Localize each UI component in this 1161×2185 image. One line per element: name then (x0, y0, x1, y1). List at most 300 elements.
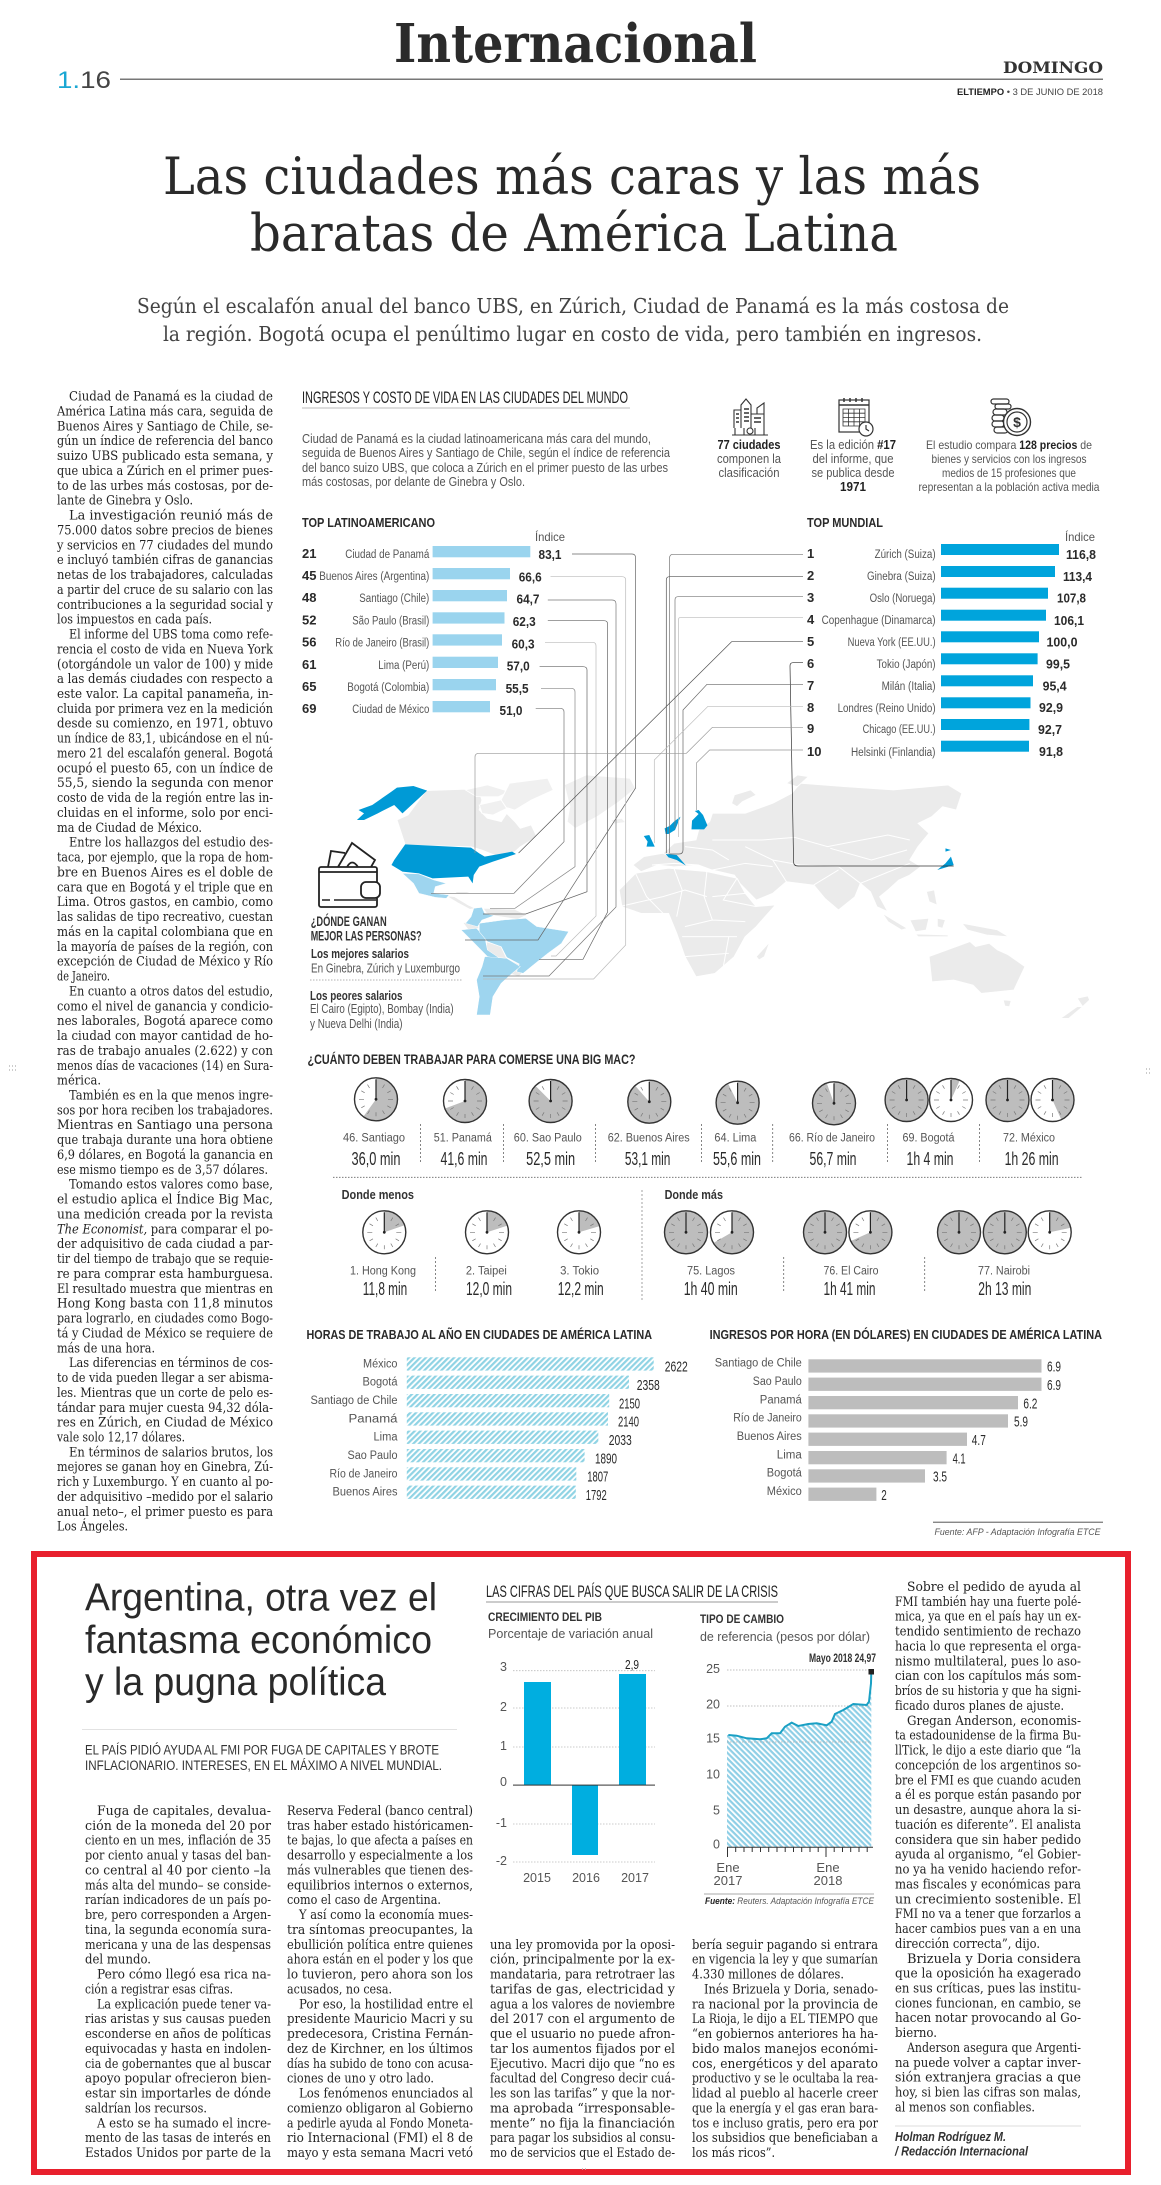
x labels: Ene (816, 1860, 840, 1875)
article text: left column: tá y Ciudad de México se requiere de (57, 1326, 273, 1341)
article text: argentina column 5: llTick, le dijo a este diario que “la (895, 1744, 1081, 1759)
article text: argentina column 5: FMI también hay una fuerte polé- (895, 1595, 1081, 1610)
article text: left column: la ciudad con mayor cantidad de ho- (57, 1029, 273, 1044)
article text: argentina column 5: tendido sentimiento de rechazo (895, 1625, 1081, 1640)
article text: argentina column 3: les son las tarifas” y que la nor- (490, 2086, 675, 2102)
city labels: México (363, 1358, 398, 1370)
ranks: 7 (807, 678, 814, 693)
article text: argentina column 5: ciones funcionan, en cambio, se (895, 1996, 1081, 2011)
chart subtitle: Porcentaje de variación anual (488, 1626, 653, 1641)
article text: left column: res en Zúrich, en Ciudad de México (57, 1416, 273, 1431)
peak label: Mayo 2018 24,97 (809, 1653, 876, 1665)
article text: argentina column 1: del mundo. (85, 1953, 151, 1968)
article text: argentina column 4: ra nacional por la provincia de (692, 1997, 878, 2012)
headline: argentina: fantasma económico (85, 1619, 432, 1662)
stat: 77 cities: 77 ciudades (718, 438, 781, 452)
city labels: top row: 69. Bogotá (902, 1133, 955, 1145)
ranks: 8 (807, 700, 814, 715)
infographic intro text: seguida de Buenos Aires y Santiago de Chile, según el índice de referencia (302, 446, 670, 460)
values: 2622 (665, 1359, 688, 1376)
chart subtitle: de referencia (pesos por dólar) (700, 1629, 870, 1644)
article text: argentina column 2 (287, 1804, 474, 2161)
bars (941, 544, 1059, 752)
article text: left column: Entre los hallazgos del estudio des- (69, 836, 273, 851)
article text: left column: cluidas en el informe, solo por enci- (57, 806, 273, 821)
article text: argentina column 1: saldrían los recursos. (85, 2101, 207, 2116)
article text: argentina column 2: rio Internacional (FMI) el 8 de (287, 2131, 473, 2146)
stat: edition 17: 1971 (840, 480, 866, 494)
panel: big mac working time (308, 1052, 1083, 1302)
article text: left column: tándar para mujer cuesta 94,32 dóla- (57, 1401, 273, 1416)
article text: argentina column 3: ma aprobada “irresponsable- (490, 2101, 675, 2116)
cities: Lima (Perú) (378, 660, 429, 672)
y labels: 25 (706, 1662, 720, 1676)
article text: argentina column 5: mas fiscales y económicas para (895, 1877, 1081, 1892)
ranks: 6 (807, 656, 814, 671)
values: 3.5 (933, 1469, 947, 1486)
city labels: Santiago de Chile (715, 1358, 802, 1370)
city labels: top row: 64. Lima (714, 1133, 757, 1145)
article text: argentina column 2: días ha subido de tono con acusa- (287, 2057, 473, 2072)
index values (500, 547, 562, 718)
article text: left column: 55,5, siendo la segunda con menor (57, 776, 274, 791)
ranks: 61 (302, 657, 316, 672)
article text: left column: El resultado muestra que mientras en (57, 1282, 274, 1297)
cities: Río de Janeiro (Brasil) (335, 638, 429, 650)
stat: 77 cities (717, 438, 781, 480)
times: top row: 55,6 min (713, 1149, 761, 1169)
index values: 92,9 (1039, 700, 1063, 715)
cities: Chicago (EE.UU.) (863, 724, 936, 736)
section name: Internacional (394, 13, 757, 75)
article text: left column: der adquisitivo –medido por el salario (57, 1490, 273, 1505)
article text: left column: que ubica a Zúrich en el primer pues- (57, 464, 273, 479)
cities: Copenhague (Dinamarca) (822, 615, 936, 627)
ranks: 1 (807, 546, 814, 561)
y axis: 2 (500, 1700, 507, 1714)
article text: left column: nes laborales, Bogotá aparece como (57, 1014, 273, 1029)
article text: argentina column 5: Sobre el pedido de ayuda al (907, 1580, 1081, 1595)
callout: where people earn better: En Ginebra, Zúrich y Luxemburgo (311, 962, 460, 976)
article text: left column: más en la capital colombiana que en (57, 925, 274, 940)
subhead: argentina: EL PAÍS PIDIÓ AYUDA AL FMI POR FUGA DE CAPITALES Y BROTE (85, 1742, 439, 1758)
times: bottom row: 11,8 min (363, 1279, 407, 1299)
article text: argentina column 3: mente” no fija la financiación (490, 2116, 676, 2131)
article text: argentina column 5: Brizuela y Doria considera (907, 1952, 1081, 1967)
article text: argentina column 5: hoy, si bien las cifras son malas, (895, 2086, 1081, 2101)
article text: argentina column 1: cia de gobernantes que al buscar (85, 2057, 272, 2072)
times: bottom row: 1h 41 min (824, 1279, 876, 1299)
icon: coins (991, 399, 1030, 436)
article text: left column: menos días de vacaciones (14) en Sura- (57, 1059, 273, 1074)
stat: 128 prices: medios de 15 profesiones que (942, 466, 1076, 480)
index values: 60,3 (512, 636, 535, 651)
cities: Buenos Aires (Argentina) (319, 571, 429, 583)
y labels: 20 (706, 1698, 720, 1712)
city labels: top row (343, 1133, 1055, 1145)
article text: left column: ese mismo tiempo es de 3,57 dólares. (57, 1163, 268, 1178)
times: top row: 36,0 min (352, 1149, 400, 1169)
city labels: bottom row: 76. El Cairo (824, 1265, 878, 1277)
article text: argentina column 1: rias aristas y sus causas pueden (85, 2012, 272, 2027)
article text: argentina column 5: en sus críticas, pues las institu- (895, 1982, 1081, 1996)
article text: argentina column 4: 4.330 millones de dólares. (692, 1968, 844, 1983)
article text: argentina column 4 (692, 1938, 879, 2161)
y axis (496, 1660, 507, 1868)
article text: argentina column 5: mica, ya que en el país hay un ex- (895, 1610, 1081, 1625)
stat: 128 prices: bienes y servicios con los ingresos (932, 452, 1086, 466)
article text: argentina column 2: predecesora, Cristina Fernán- (287, 2027, 473, 2042)
callout: where people earn better (310, 912, 462, 1031)
article text: left column: Tomando estos valores como base, (69, 1178, 273, 1193)
article text: argentina column 4: lidad al pueblo al hacerle creer (692, 2086, 879, 2102)
article text: left column: les. Mientras que un corte de pelo es- (57, 1386, 273, 1401)
article text: argentina column 4: “en gobiernos anteriores ha ha- (692, 2027, 878, 2042)
x axis: 2015 (523, 1871, 551, 1885)
article text: left column: netas de los trabajadores, calculadas (57, 568, 273, 583)
callout: where people earn better: ¿DÓNDE GANAN (311, 912, 387, 929)
stat: 77 cities: componen la (717, 452, 781, 466)
subhead: argentina (85, 1742, 442, 1773)
article text: left column: 75.000 datos sobre precios de bienes (57, 523, 273, 538)
highlighted Latin American countries (402, 873, 569, 1015)
article text: argentina column 1: apoyo popular ofrecieron bien- (85, 2072, 271, 2087)
article text: argentina column 1: ciento en un mes, inflación de 35 (85, 1834, 271, 1849)
ranks: 56 (302, 634, 316, 650)
values: 6.2 (1023, 1395, 1037, 1412)
city labels: top row: 46. Santiago (343, 1133, 405, 1145)
article text: argentina column 5: un crecimiento sostenible. El (895, 1892, 1081, 1907)
article text: left column: un índice de 83,1, ubicándose en el nú- (57, 732, 273, 747)
article text: argentina column 2: lo tuvieron, pero ahora son los (287, 1968, 473, 1983)
byline: / Redacción Internacional (894, 2144, 1028, 2159)
article text: argentina column 5: hacen notar provocando al Go- (895, 2011, 1081, 2026)
article text: argentina column 5: bríos de su historia y que ha signi- (895, 1684, 1081, 1699)
city labels: top row: 66. Río de Janeiro (789, 1133, 875, 1145)
cities: Milán (Italia) (882, 681, 936, 693)
article text: argentina column 3: una ley promovida por la oposi- (490, 1938, 675, 1953)
values (881, 1359, 1061, 1504)
ranks: 65 (302, 679, 316, 694)
callout: where people earn better: MEJOR LAS PERSONAS? (311, 928, 422, 944)
line chart: exchange rate (700, 1614, 876, 1907)
index values: 99,5 (1046, 656, 1070, 671)
article text: left column: ras de trabajo anuales (2.622) y con (57, 1044, 274, 1059)
article text: argentina column 4: tos e incluso gratis, pero era por (692, 2116, 879, 2131)
times: bottom row: 1h 40 min (684, 1279, 738, 1299)
article text: argentina column 4: productivo y se le ocultaba la rea- (692, 2072, 878, 2087)
times: bottom row: 12,2 min (558, 1279, 604, 1299)
article text: argentina column 2: ebullición política entre quienes (287, 1938, 473, 1953)
article text: left column: tir del tiempo de trabajo que se requie- (57, 1252, 273, 1267)
article text: argentina column 3: mo de servicios que el Estado de- (490, 2146, 675, 2161)
ranks: 21 (302, 546, 316, 561)
article text: argentina column 5: Gregan Anderson, economis- (907, 1714, 1081, 1729)
city labels: top row: 62. Buenos Aires (608, 1133, 690, 1145)
article text: argentina column 5: a él es porque están pasando por (895, 1788, 1082, 1803)
stat: 128 prices: El estudio compara 128 precios de (926, 438, 1092, 452)
values: 2150 (619, 1395, 640, 1412)
cities: São Paulo (Brasil) (352, 616, 429, 628)
times: top row: 1h 26 min (1005, 1149, 1059, 1169)
values: 2140 (618, 1414, 639, 1431)
article text: left column: vale solo 12,17 dólares. (56, 1430, 185, 1446)
article text: argentina column 4: que la energía y el gas eran bara- (692, 2101, 878, 2116)
article text: argentina column 5 (895, 1580, 1082, 2116)
article text: left column: Buenos Aires y Santiago de Chile, se- (57, 419, 273, 434)
article text: left column: Hong Kong basta con 11,8 minutos (57, 1297, 273, 1312)
article text: left column: las salidas de tipo recreativo, cuestan (57, 910, 274, 925)
article text: left column: 6,9 dólares, en Bogotá la ganancia en (57, 1148, 274, 1163)
article text: argentina column 3: del 2017 con el argumento de (490, 2012, 675, 2027)
article text: left column: costo de vida de la región entre las in- (57, 791, 273, 806)
article text: argentina column 5: hacia lo que representa el orga- (895, 1640, 1081, 1654)
article text: argentina column 2: equilibrios internos o externos, (287, 1878, 473, 1893)
connector lines from ranking to map (431, 554, 954, 979)
city labels: Lima (374, 1432, 398, 1444)
subtitle: Según el escalafón anual del banco UBS, en Zúrich, Ciudad de Panamá es la más costosa de (137, 294, 1009, 318)
article text: argentina column 2: más vulnerables que tienen des- (287, 1864, 473, 1878)
index values: 62,3 (513, 614, 536, 629)
article text: left column: sos por hora reciben los trabajadores. (57, 1103, 273, 1118)
article text: argentina column 2: como el caso de Argentina. (287, 1893, 441, 1908)
article text: argentina column 5: tuación es diferente”. El analista (895, 1818, 1081, 1833)
article text: left column: mejores se ganan hoy en Ginebra, Zú- (57, 1460, 273, 1475)
article text: argentina column 5: na puede volver a captar inver- (895, 2056, 1081, 2071)
heading: TOP LATINOAMERICANO (302, 515, 435, 530)
cities: Ciudad de México (352, 704, 429, 716)
clocks: bottom row (363, 1211, 1071, 1254)
x axis: 2016 (572, 1871, 600, 1885)
article text: left column: to de vida pueden llegar a ser abisma- (57, 1371, 273, 1386)
y axis: -2 (496, 1854, 507, 1868)
article text: argentina column 2: tras haber estado históricamen- (287, 1819, 473, 1834)
article text: argentina column 1: ción a registrar esas cifras. (85, 1982, 233, 1997)
heading: HORAS DE TRABAJO AL AÑO EN CIUDADES DE AMÉRICA LATINA (306, 1327, 653, 1342)
city labels (715, 1358, 802, 1498)
values (586, 1359, 688, 1504)
bars (433, 546, 530, 712)
article text: left column: Los Ángeles. (57, 1519, 128, 1535)
article text: left column: América Latina más cara, seguida de (56, 404, 273, 420)
ranks: 2 (807, 568, 814, 583)
city labels: Buenos Aires (332, 1487, 398, 1499)
main title: Las ciudades más caras y las más (163, 148, 981, 207)
article text: argentina column 5: que la oposición ha exagerado (895, 1967, 1081, 1982)
chart title: TIPO DE CAMBIO (700, 1614, 784, 1626)
article text: left column: En cuanto a otros datos del estudio, (69, 984, 273, 999)
heading: TOP MUNDIAL (807, 515, 883, 530)
y labels: 5 (713, 1804, 720, 1818)
y axis: 3 (500, 1660, 507, 1674)
city labels: bottom row: 1. Hong Kong (350, 1265, 416, 1277)
article text: argentina column 1: tina, la segunda economía sura- (85, 1923, 271, 1938)
city labels: bottom row: 77. Nairobi (978, 1265, 1030, 1277)
x labels: 2017 (714, 1873, 742, 1888)
article text: left column: la mayoría de países de la región, con (57, 940, 274, 955)
source note: Fuente: AFP - Adaptación Infografía ETCE (934, 1527, 1101, 1538)
article text: argentina column 5: concepción de los argentinos so- (895, 1758, 1081, 1773)
article text: argentina column 4: en vigencia la ley y que sumarían (692, 1953, 879, 1968)
article text: argentina column 2: ciones de uno y otro lado. (287, 2072, 434, 2087)
article text: argentina column 1: La explicación puede tener va- (97, 1997, 271, 2012)
ranks: 4 (807, 612, 815, 627)
peak marker (868, 1669, 874, 1674)
city labels: Río de Janeiro (733, 1413, 802, 1425)
city labels: Santiago de Chile (310, 1395, 398, 1407)
article text: left column: El informe del UBS toma como refe- (69, 628, 273, 642)
times: bottom row: 12,0 min (466, 1279, 512, 1299)
ranks: 48 (302, 590, 316, 605)
article text: argentina column 2: desarrollo y especialmente a los (287, 1849, 473, 1864)
article text: left column: desde su comienzo, en 1971, obtuvo (57, 717, 273, 732)
article text: argentina column 1: Fuga de capitales, devalua- (97, 1804, 271, 1819)
article text: left column: lante de Ginebra y Oslo. (57, 494, 193, 509)
values: 2033 (609, 1432, 632, 1449)
times: top row: 56,7 min (810, 1149, 856, 1169)
heading: ¿CUÁNTO DEBEN TRABAJAR PARA COMERSE UNA BIG MAC? (308, 1052, 636, 1067)
article text: argentina column 4: bido malos manejos económi- (692, 2042, 878, 2057)
article text: left column: Lima. Otros gastos, en cambio, como (57, 895, 273, 910)
clocks: top row (354, 1078, 1074, 1125)
bar chart: annual working hours (306, 1327, 688, 1504)
article text: argentina column 3: que el usuario no puede afron- (490, 2027, 675, 2042)
article text: argentina column 1: estar sin importarles de dónde (85, 2086, 271, 2102)
article text: argentina column 2: presidente Mauricio Macri y su (287, 2012, 473, 2027)
article text: argentina column 5: considera que sin haber pedido (895, 1833, 1081, 1848)
article text: argentina column 1: Pero cómo llegó esa rica na- (97, 1968, 271, 1983)
article text: argentina column 5: un desastre, aunque ahora la si- (895, 1803, 1081, 1818)
article text: left column: de Janeiro. (57, 970, 110, 984)
times: bottom row (363, 1279, 1031, 1299)
cities: Nueva York (EE.UU.) (848, 637, 936, 649)
article text: argentina column 5: bierno. (895, 2026, 937, 2041)
cities: Helsinki (Finlandia) (851, 747, 936, 759)
index label: Índice (535, 529, 565, 544)
values: 4.1 (953, 1450, 966, 1467)
article text: argentina column 5: sión extranjera gracias a que (895, 2071, 1081, 2086)
article text: argentina column 4: Inés Brizuela y Doria, senado- (704, 1982, 878, 1997)
stat: edition 17: se publica desde (812, 466, 895, 480)
index values: 113,4 (1063, 569, 1093, 584)
article text: argentina column 4: los más ricos”. (692, 2146, 775, 2161)
x axis (727, 1847, 873, 1857)
article text: argentina column 1: Estados Unidos por parte de la (85, 2146, 271, 2161)
values: 1890 (595, 1450, 617, 1467)
index values: 106,1 (1054, 613, 1084, 628)
ranks: 45 (302, 568, 316, 583)
index values: 100,0 (1046, 635, 1078, 650)
article text: left column: cluida por primera vez en la medición (57, 702, 274, 717)
infographic intro text (302, 432, 670, 489)
article text: argentina column 1: más alta del mundo– se conside- (85, 1878, 271, 1893)
headline: argentina: Argentina, otra vez el (85, 1577, 437, 1620)
article text: argentina column 5: al menos son confiables. (895, 2100, 1035, 2116)
article text: argentina column 3: mandataria, para retrotraer las (490, 1968, 675, 1983)
article text: left column: e incluyó también cifras de ganancias (57, 553, 273, 568)
index values: 116,8 (1066, 547, 1096, 562)
article text: left column: der adquisitivo de cada ciudad a par- (57, 1237, 273, 1252)
cities: Santiago (Chile) (359, 593, 429, 605)
index values: 95,4 (1043, 678, 1067, 693)
index values: 83,1 (538, 547, 562, 562)
article text: left column: contribuciones a la seguridad social y (57, 598, 274, 613)
index values: 55,5 (506, 681, 529, 696)
article text: left column: The Economist, para comparar el po- (57, 1222, 273, 1237)
x labels: Ene (716, 1860, 740, 1875)
city labels: Río de Janeiro (330, 1468, 398, 1480)
city labels: bottom row (350, 1265, 1030, 1277)
day: DOMINGO (1003, 58, 1103, 77)
stat: edition 17 (810, 438, 896, 494)
cities: Oslo (Noruega) (870, 593, 936, 605)
y axis: -1 (496, 1816, 507, 1830)
x labels: 2018 (814, 1873, 842, 1888)
city labels: bottom row: 3. Tokio (560, 1265, 599, 1277)
index values: 92,7 (1038, 722, 1062, 737)
article text: argentina column 2: comienzo obligaron al Gobierno (287, 2101, 473, 2116)
article text: argentina column 5: no ya ha venido haciendo refor- (895, 1862, 1081, 1878)
icon: city buildings (732, 399, 768, 435)
x labels (714, 1860, 842, 1888)
index values (1038, 547, 1096, 759)
values: 1792 (586, 1487, 607, 1504)
callout: where people earn better: Los mejores salarios (311, 947, 409, 961)
article text: argentina column 1: mento de las tasas de interés en (85, 2131, 272, 2146)
values: 1807 (587, 1469, 608, 1486)
article text: left column: que trabaja durante una hora obtiene (57, 1133, 273, 1148)
x axis: 2017 (621, 1871, 649, 1885)
article text: argentina column 1: mericana y una de las despensas (85, 1938, 271, 1953)
ranks: 3 (807, 590, 814, 605)
date: ELTIEMPO • 3 DE JUNIO DE 2018 (957, 87, 1103, 98)
article text: argentina column 2: acusados, no cesa. (287, 1982, 392, 1997)
article text: left column: gún un índice de referencia del banco (57, 434, 273, 449)
y labels: 0 (713, 1838, 720, 1852)
stat: 128 prices (918, 438, 1100, 494)
article text: argentina column 5: nismo multilateral, pues lo aso- (895, 1654, 1081, 1669)
y labels (706, 1662, 720, 1852)
article text: left column: a las demás ciudades con respecto a (57, 672, 273, 687)
article text: left column: cara que en Bogotá y el triple que en (57, 880, 274, 895)
ranks (807, 546, 821, 759)
article text: argentina column 5: ficado duros planes de ajuste. (895, 1699, 1064, 1714)
article text: argentina column 1: bre, pero corresponden a Argen- (85, 1908, 271, 1923)
cities: Ciudad de Panamá (345, 549, 430, 561)
subheading: where more: Donde más (665, 1188, 723, 1202)
ranks: 9 (807, 721, 814, 736)
times: top row: 53,1 min (625, 1149, 670, 1169)
article text: argentina column 3: facultad del Congreso decir cuá- (490, 2072, 675, 2087)
article text: argentina column 1: rarían indicadores de un país po- (85, 1893, 271, 1908)
stat: 128 prices: representan a la población activa media (918, 480, 1100, 494)
subtitle (137, 294, 1009, 346)
article text: left column: Ciudad de Panamá es la ciudad de (69, 390, 273, 405)
article text: argentina column 3 (490, 1938, 676, 2161)
article text: argentina column 2: dez de Kirchner, en los últimos (287, 2042, 473, 2057)
article text: left column: (otorgándole un valor de 100) y mide (57, 657, 273, 672)
city labels: top row: 72. México (1003, 1133, 1055, 1145)
cities (319, 549, 430, 716)
article text: argentina column 1 (85, 1804, 272, 2161)
values: 6.9 (1047, 1359, 1061, 1376)
article text: left column: taca, por ejemplo, que la ropa de hom- (57, 851, 273, 866)
city labels: Buenos Aires (737, 1431, 802, 1443)
y labels: 15 (706, 1732, 720, 1746)
values: 2358 (637, 1377, 660, 1394)
byline (894, 2129, 1028, 2159)
highlighted cost-of-living cities' countries (357, 786, 954, 883)
